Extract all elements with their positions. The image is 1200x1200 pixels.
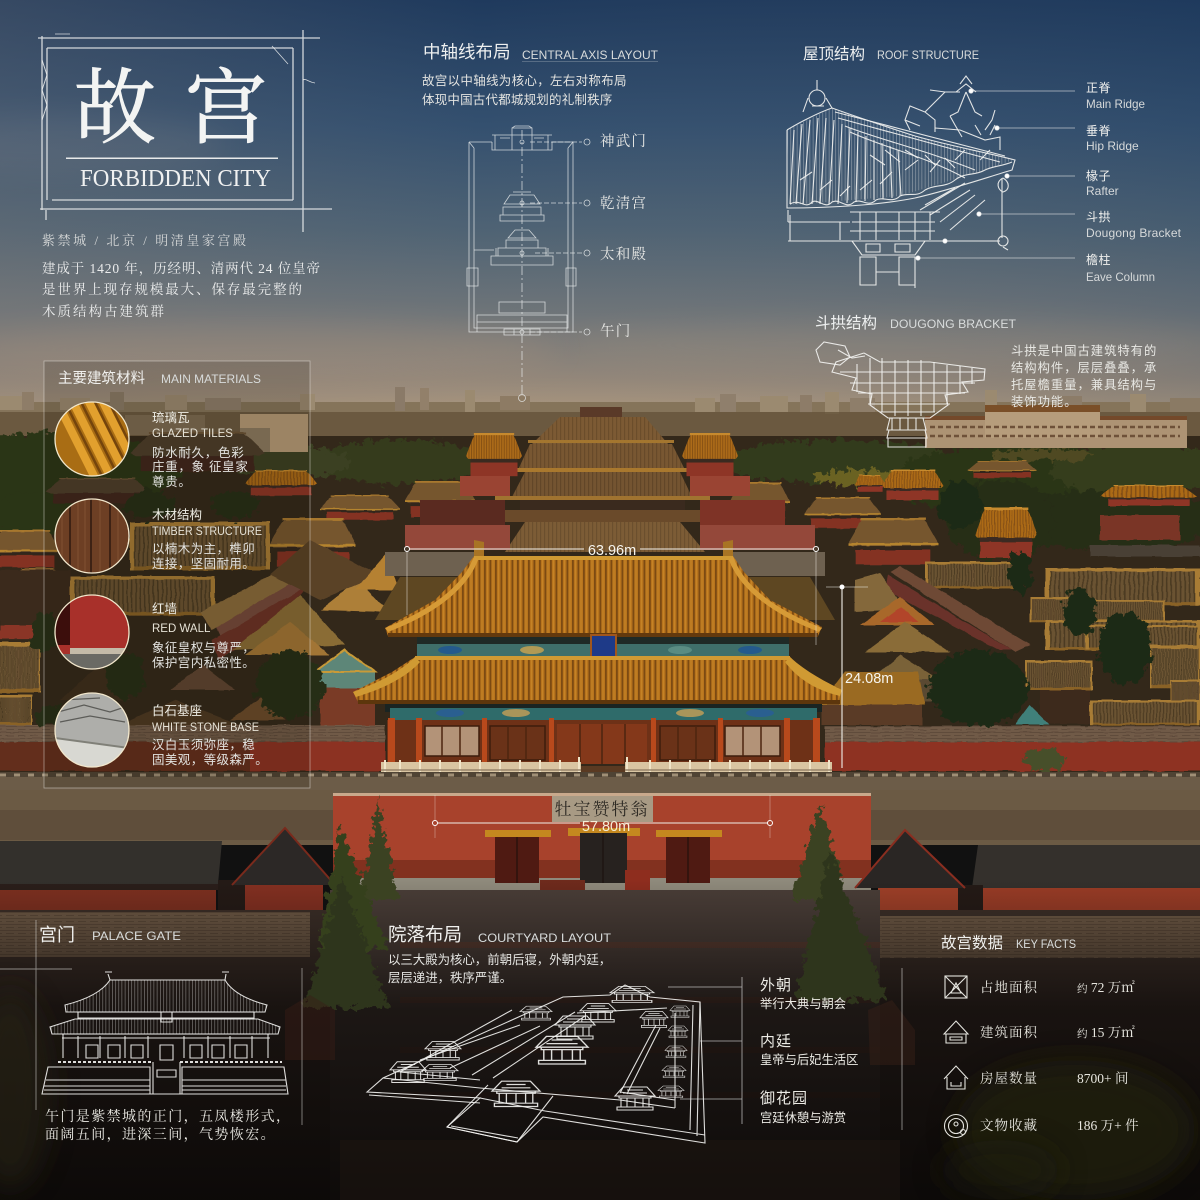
panel: central axis layout: 体现中国古代都城规划的礼制秩序 <box>422 92 613 107</box>
courtyard isometric drawing <box>367 985 705 1143</box>
panel: roof structure: 屋顶结构 <box>803 45 865 63</box>
dougong description <box>1011 343 1157 409</box>
roof part labels: Main Ridge <box>1086 97 1145 111</box>
material: glazed tiles: GLAZED TILES <box>152 428 233 440</box>
gate elevation drawing <box>42 972 288 1094</box>
sketch frame <box>38 30 332 232</box>
axis labels: 午门 <box>600 323 631 340</box>
fact: floor area: 约 15 万㎡ <box>1077 1025 1135 1040</box>
roof part labels: Eave Column <box>1086 270 1155 284</box>
dark lower gradient <box>0 880 1200 1200</box>
marble balustrade <box>381 757 832 778</box>
material: white stone base: 汉白玉须弥座，稳 <box>152 737 255 752</box>
subtitle: FORBIDDEN CITY <box>80 166 271 192</box>
dougong description: 托屋檐重量，兼具结构与 <box>1011 377 1157 392</box>
roof line drawing <box>787 76 1015 288</box>
courtyard zone labels: 宫廷休憩与游赏 <box>760 1110 846 1125</box>
sky <box>0 0 1200 420</box>
icon: hall <box>944 1021 968 1043</box>
roof part labels: 椽子 <box>1086 169 1111 183</box>
fact: collection: 文物收藏 <box>980 1117 1038 1133</box>
roof part labels: 檐柱 <box>1086 252 1111 267</box>
intro text: 紫禁城 / 北京 / 明清皇家宫殿 <box>42 233 246 248</box>
fact: collection: 186 万+ 件 <box>1077 1118 1139 1133</box>
material: glazed tiles: 琉璃瓦 <box>152 411 190 425</box>
panel: dougong bracket <box>815 314 1157 447</box>
material: glazed tiles: 庄重，象 征皇家 <box>152 459 249 474</box>
courtyard callouts <box>668 977 742 1124</box>
gate description <box>45 1108 291 1143</box>
panel: main materials <box>44 361 310 788</box>
title block <box>38 30 332 232</box>
surrounding halls left <box>0 432 475 771</box>
intro text: 是世界上现存规模最大、保存最完整的 <box>42 281 302 297</box>
axis labels: 神武门 <box>600 133 647 150</box>
panel: dougong bracket: DOUGONG BRACKET <box>890 317 1017 331</box>
dimension: 63.96m width <box>404 543 818 645</box>
icon: relic disc <box>944 1114 968 1138</box>
fact: site area: 约 72 万㎡ <box>1077 980 1135 995</box>
panel: key facts: 故宫数据 <box>941 934 1003 952</box>
lower foliage <box>0 990 1195 1200</box>
fact: rooms <box>944 1066 1128 1089</box>
axis plan diagram <box>467 126 590 402</box>
ground of palace complex <box>0 436 1200 777</box>
main hall: middle storey frieze <box>417 635 789 667</box>
material: red wall <box>55 595 255 670</box>
panel: main materials: 主要建筑材料 <box>58 370 145 387</box>
panel: courtyard layout: COURTYARD LAYOUT <box>478 931 612 945</box>
intro text: 木质结构古建筑群 <box>42 303 164 319</box>
panel: dougong bracket: 斗拱结构 <box>815 314 877 332</box>
roof part labels: 斗拱 <box>1086 210 1111 224</box>
courtyard zone labels: 御花园 <box>760 1090 808 1107</box>
roof part labels: Rafter <box>1086 184 1119 198</box>
material: timber structure: 连接，坚固耐用。 <box>152 556 255 571</box>
main hall: lower roof <box>353 656 842 704</box>
dimension: 63.96m width: 63.96m <box>588 543 636 559</box>
panel: courtyard layout: 院落布局 <box>388 924 462 945</box>
panel: central axis layout: 中轴线布局 <box>423 42 510 62</box>
icon: house <box>944 1066 968 1089</box>
surrounding halls right <box>730 461 1200 771</box>
outer city wall <box>0 772 1200 845</box>
axis labels: 乾清宫 <box>600 194 647 212</box>
panel: roof structure <box>787 45 1182 288</box>
side pavilions and long halls <box>0 828 1200 916</box>
material: timber structure <box>55 499 262 573</box>
material: white stone base: WHITE STONE BASE <box>152 722 259 734</box>
dimension: 57.80m gate: 57.80m <box>582 819 630 835</box>
roof part labels: Hip Ridge <box>1086 139 1139 153</box>
panel: courtyard layout: 以三大殿为核心，前朝后寝，外朝内廷， <box>388 952 611 967</box>
courtyard zone labels: 外朝 <box>760 977 792 994</box>
dougong description: 装饰功能。 <box>1011 395 1078 409</box>
meridian gate red wall <box>333 793 871 894</box>
courtyard zone labels: 内廷 <box>760 1033 792 1050</box>
material: red wall: RED WALL <box>152 623 211 635</box>
gate description: 午门是紫禁城的正门，五凤楼形式， <box>45 1108 291 1125</box>
fact: floor area <box>944 1021 1135 1043</box>
panel: palace gate: PALACE GATE <box>92 929 181 943</box>
icon: site plan <box>945 976 967 998</box>
material: white stone base: 固美观，等级森严。 <box>152 752 268 767</box>
panel: key facts: KEY FACTS <box>1016 937 1076 951</box>
dimension: 24.08m height: 24.08m <box>845 671 893 687</box>
fact: site area: 占地面积 <box>980 979 1038 995</box>
material: red wall: 红墙 <box>152 601 177 616</box>
courtyard zone labels: 举行大典与朝会 <box>760 997 846 1011</box>
courtyard zone labels <box>760 977 858 1125</box>
courtyard ground <box>0 890 1200 1200</box>
dimension: 57.80m gate <box>432 795 772 838</box>
dougong description: 结构构件，层层叠叠，承 <box>1011 360 1157 375</box>
cypress trees <box>304 796 888 1008</box>
panel: palace gate <box>0 920 302 1143</box>
material: timber structure: 以楠木为主，榫卯 <box>152 541 255 556</box>
roof part labels <box>1086 81 1182 284</box>
material: red wall: 保护宫内私密性。 <box>152 655 255 670</box>
fact: site area <box>945 976 1135 998</box>
central axis halls behind <box>375 407 835 620</box>
intro text <box>42 233 320 319</box>
fact: collection <box>944 1114 1139 1138</box>
panel: central axis layout: 故宫以中轴线为核心，左右对称布局 <box>422 73 627 88</box>
fact: floor area: 建筑面积 <box>980 1024 1038 1040</box>
material: white stone base: 白石基座 <box>152 703 202 718</box>
meridian gate red wall: 牡宝赞特翁 <box>554 800 650 819</box>
title: 故宫: 故宫 <box>74 63 296 154</box>
axis labels: 太和殿 <box>600 246 647 263</box>
dougong description: 斗拱是中国古建筑特有的 <box>1011 343 1157 358</box>
panel: courtyard layout: 层层递进，秩序严谨。 <box>388 970 512 985</box>
material: glazed tiles: 防水耐久，色彩 <box>152 445 244 460</box>
material: glazed tiles <box>54 401 248 488</box>
city skyline <box>0 387 1200 452</box>
fact: rooms: 8700+ 间 <box>1077 1071 1128 1086</box>
main hall: ground floor facade <box>385 704 822 764</box>
material: timber structure: TIMBER STRUCTURE <box>152 526 262 538</box>
material: red wall: 象征皇权与尊严， <box>152 640 255 655</box>
left trees <box>31 491 324 725</box>
axis labels <box>600 133 647 340</box>
panel: central axis layout <box>422 42 659 402</box>
intro text: 建成于 1420 年，历经明、清两代 24 位皇帝 <box>42 260 320 277</box>
panel: key facts <box>902 934 1139 1138</box>
main hall: upper roof <box>385 540 822 637</box>
right trees <box>928 481 1151 772</box>
panel: palace gate: 宫门 <box>39 925 75 945</box>
dougong line drawing <box>816 342 985 447</box>
tree belt behind palace <box>0 432 1200 560</box>
dimension: 24.08m height <box>826 584 893 768</box>
distant hotel building <box>125 405 1187 452</box>
material: timber structure: 木材结构 <box>152 507 202 522</box>
roof part labels: 垂脊 <box>1086 124 1111 138</box>
panel: courtyard layout <box>367 924 858 1143</box>
panel: central axis layout: CENTRAL AXIS LAYOUT <box>522 48 659 62</box>
material: glazed tiles: 尊贵。 <box>152 474 192 489</box>
panel: main materials: MAIN MATERIALS <box>161 372 261 386</box>
courtyard zone labels: 皇帝与后妃生活区 <box>760 1052 858 1067</box>
roof callouts <box>916 89 1075 260</box>
gate description: 面阔五间，进深三间，气势恢宏。 <box>45 1126 276 1143</box>
fact: rooms: 房屋数量 <box>980 1070 1038 1086</box>
roof part labels: Dougong Bracket <box>1086 226 1182 240</box>
material: white stone base <box>55 693 268 770</box>
panel: roof structure: ROOF STRUCTURE <box>877 48 979 62</box>
roof part labels: 正脊 <box>1086 81 1111 95</box>
